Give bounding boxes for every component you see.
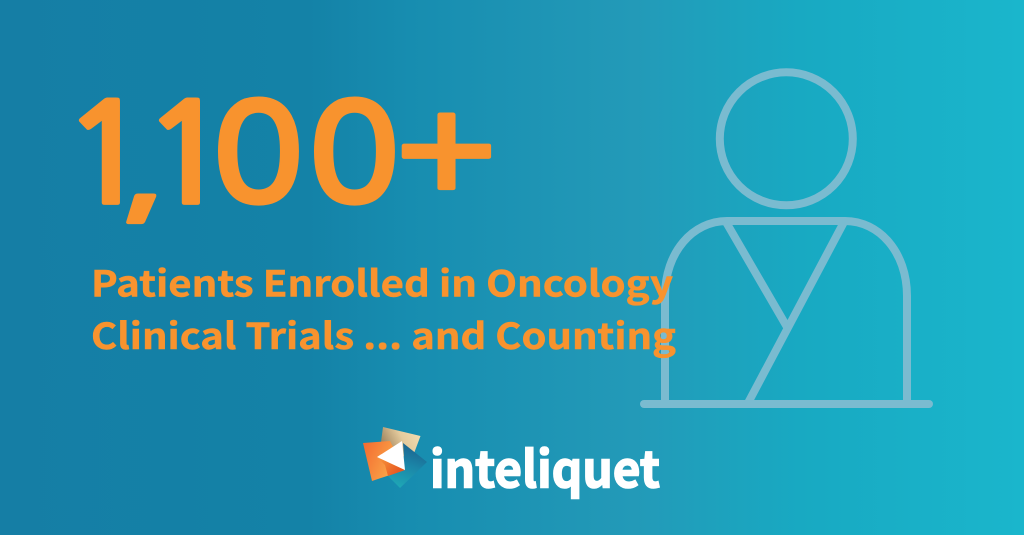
logo: inteliquet	[363, 427, 660, 502]
icon: patient outline	[644, 72, 929, 404]
headline number: 1,100+	[59, 87, 498, 225]
person head	[720, 72, 853, 205]
subheading text	[91, 256, 676, 360]
person shoulders and sash	[665, 221, 907, 404]
subheading line 1: Patients Enrolled in Oncology	[91, 256, 673, 308]
logo wordmark: inteliquet	[430, 430, 660, 502]
person base line	[644, 400, 929, 408]
subheading line 2: Clinical Trials ... and Counting	[91, 308, 676, 360]
logo mark	[363, 427, 427, 488]
